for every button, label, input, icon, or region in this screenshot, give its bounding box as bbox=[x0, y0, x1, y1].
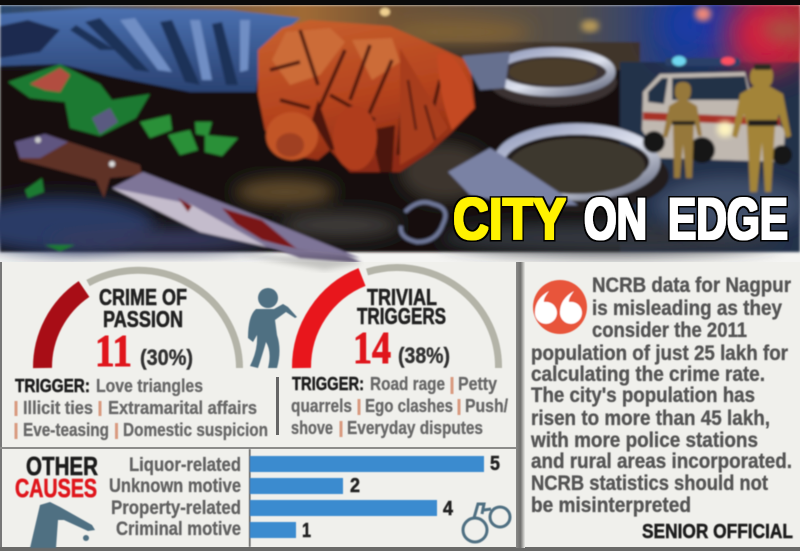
heading: trivial triggers bbox=[357, 284, 446, 329]
triggers list: trivial triggers bbox=[291, 373, 508, 438]
gauge: 30 percent bbox=[42, 270, 240, 368]
bar labels: Criminal motive bbox=[116, 518, 241, 540]
stat: 11 (30%): (30%) bbox=[140, 345, 193, 370]
panel: crime of passion bbox=[15, 270, 268, 440]
title: CITY ON EDGE: CITY bbox=[453, 187, 566, 252]
police van bbox=[642, 72, 785, 162]
triggers list: trivial triggers: Push/ bbox=[465, 395, 508, 416]
triggers list: trivial triggers: Road rage bbox=[370, 373, 445, 394]
triggers list: crime of passion: Domestic suspicion bbox=[123, 419, 268, 440]
quote text: with more police stations bbox=[530, 428, 758, 452]
stat: 14 (38%): (38%) bbox=[398, 343, 450, 368]
green bottle shards bbox=[8, 64, 150, 136]
icon: handcuffs bbox=[463, 504, 510, 542]
heading: other causes bbox=[15, 451, 98, 503]
police officer right bbox=[732, 66, 791, 192]
triggers list: crime of passion: TRIGGER: bbox=[15, 375, 90, 396]
quote text: consider the 2011 bbox=[592, 318, 747, 342]
triggers list: trivial triggers: quarrels bbox=[291, 395, 352, 416]
quote text: calculating the crime rate. bbox=[531, 362, 765, 386]
quote text: NCRB statistics should not bbox=[531, 471, 768, 495]
triggers list: crime of passion: Love triangles bbox=[96, 375, 203, 396]
panel: other causes bbox=[15, 449, 510, 548]
bar chart: 2 bbox=[350, 475, 360, 497]
gauge: 38 percent bbox=[301, 268, 499, 368]
heading: trivial triggers: TRIVIAL bbox=[367, 284, 437, 310]
icon: hand holding bottle bbox=[30, 502, 95, 548]
heading: crime of passion bbox=[99, 284, 187, 332]
panel: trivial triggers bbox=[291, 268, 508, 438]
knife tip shadow on panel bbox=[240, 255, 362, 270]
quote text bbox=[530, 273, 792, 517]
triggers list: crime of passion: Illicit ties bbox=[23, 397, 93, 418]
vertical divider between trigger lists bbox=[276, 377, 279, 435]
heading: trivial triggers: TRIGGERS bbox=[357, 303, 446, 329]
knife tip over white strip bbox=[262, 244, 362, 263]
triggers list: trivial triggers: Everyday disputes bbox=[347, 417, 483, 438]
quote text: risen to more than 45 lakh, bbox=[531, 406, 770, 430]
lower panel frame bbox=[0, 262, 800, 551]
sleeve bbox=[0, 8, 300, 92]
triggers list: crime of passion: Extramarital affairs bbox=[108, 397, 257, 418]
lower handcuff bbox=[485, 140, 669, 212]
icon: person with knife bbox=[248, 288, 297, 368]
bar labels bbox=[109, 454, 241, 540]
quote text: be misinterpreted bbox=[531, 493, 691, 517]
knife bbox=[15, 134, 142, 198]
hero photo illustration bbox=[0, 0, 800, 263]
heading: other causes: CAUSES bbox=[15, 473, 97, 503]
title: CITY ON EDGE: ON bbox=[584, 187, 647, 252]
triggers list: trivial triggers: Ego clashes bbox=[365, 395, 453, 416]
panel: official quote bbox=[530, 273, 793, 543]
bar labels: Liquor-related bbox=[129, 454, 241, 476]
heading: crime of passion: CRIME OF bbox=[99, 284, 187, 310]
bar chart bbox=[249, 449, 500, 547]
heading: crime of passion: PASSION bbox=[103, 306, 183, 332]
title: CITY ON EDGE bbox=[453, 187, 788, 252]
bar chart: 5 bbox=[490, 453, 500, 475]
stat: 14 (38%) bbox=[353, 322, 450, 373]
stat: 11 (30%) bbox=[95, 325, 193, 376]
bar chart: 4 bbox=[443, 498, 454, 520]
bar chart: 1 bbox=[302, 520, 311, 542]
hand bbox=[258, 20, 475, 172]
icon: quotation mark bbox=[533, 280, 587, 334]
triggers list: trivial triggers: shove bbox=[291, 417, 333, 438]
police officer left bbox=[663, 82, 702, 178]
bar labels: Unknown motive bbox=[109, 475, 241, 497]
triggers list: trivial triggers: TRIGGER: bbox=[292, 373, 364, 394]
bar labels: Property-related bbox=[111, 497, 241, 519]
upper handcuff bbox=[489, 58, 617, 106]
triggers list: crime of passion bbox=[15, 375, 268, 440]
quote text: The city's population has bbox=[531, 383, 755, 407]
triggers list: crime of passion: Eve-teasing bbox=[23, 419, 109, 440]
triggers list: trivial triggers: Petty bbox=[458, 373, 498, 394]
heading: other causes: OTHER bbox=[26, 451, 98, 481]
stat: 11 (30%): 11 bbox=[95, 325, 132, 376]
ground patches bbox=[0, 197, 155, 253]
stat: 14 (38%): 14 bbox=[353, 322, 391, 373]
